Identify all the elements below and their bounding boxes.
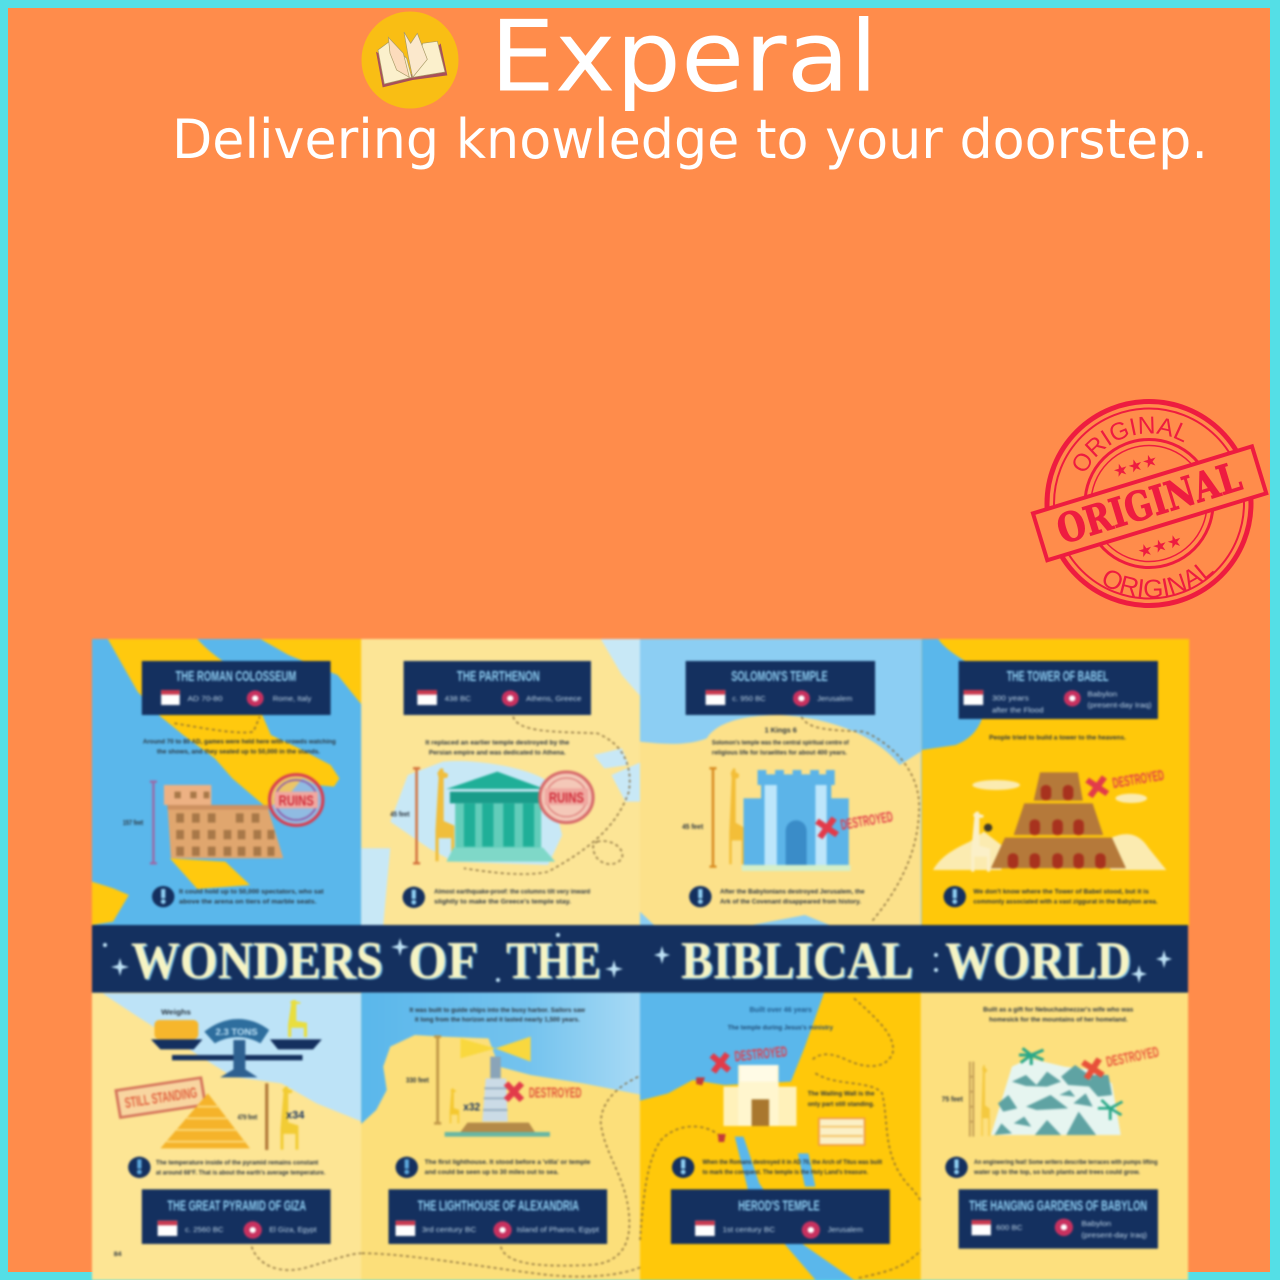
description [712, 726, 849, 756]
caption: info: at around 68°F. That is about the earth's average temperature. [156, 1169, 325, 1177]
caption: info: An engineering feat! Some writers describe terraces with pumps lifting [974, 1159, 1158, 1166]
map: sea [103, 993, 362, 1122]
description: it long from the horizon and it lasted nearly 1,500 years. [415, 1016, 580, 1023]
caption: info: to mark the conquest. The temple is the Holy Land's treasure. [702, 1169, 868, 1176]
height scale [406, 1037, 441, 1123]
panel: Herod's Temple [640, 993, 929, 1280]
panel: Hanging Gardens of Babylon [921, 993, 1188, 1280]
panel: Roman Colosseum [92, 639, 362, 926]
header box: HEROD'S TEMPLE [738, 1198, 820, 1215]
route [362, 1075, 642, 1277]
caption: info: The temperature inside of the pyramid remains constant [156, 1160, 319, 1167]
label: destroyed [506, 1083, 582, 1101]
illustration: gardens [991, 1048, 1122, 1135]
giraffe [435, 768, 454, 861]
title banner: WORLD [945, 932, 1131, 990]
height scale [682, 768, 716, 867]
title banner: OF [410, 933, 480, 991]
height scale [238, 1083, 267, 1150]
stamp: original seal: ORIGINAL [1073, 416, 1184, 471]
infographic artwork [92, 639, 1189, 1280]
map: Italy [92, 639, 362, 925]
title banner: THE [508, 933, 602, 991]
header box: THE PARTHENON [457, 668, 540, 685]
route [801, 717, 919, 922]
header box [959, 1189, 1158, 1249]
title banner: WORLD [946, 933, 1132, 991]
description: religious life for Israelites for about 400 years. [712, 749, 847, 756]
caption: info: water up to the top, so lush plants and trees could grow. [973, 1169, 1140, 1176]
header box: c. 950 BC [732, 694, 766, 703]
caption: info: Almost earthquake-proof: the columns tilt very inward [434, 888, 590, 895]
header box: SOLOMON'S TEMPLE [731, 668, 828, 685]
header box: 438 BC [445, 694, 472, 703]
map: water [922, 639, 987, 750]
route markers [696, 1077, 726, 1142]
description: 1 Kings 6 [765, 726, 797, 734]
header box: THE GREAT PYRAMID OF GIZA [167, 1198, 306, 1215]
caption: info: commonly associated with a vast ziggurat in the Babylon area. [973, 898, 1158, 905]
title banner: BIBLICAL [681, 932, 913, 990]
caption: info: When the Romans destroyed it in AD 70, the Arch of Titus was built [702, 1159, 883, 1166]
caption: info: above the arena on tiers of marble seats. [179, 898, 317, 905]
description: Around 70 to 80 AD, games were held here with crowds watching [143, 738, 336, 745]
stamp: original seal [1030, 399, 1269, 608]
header box [671, 1189, 890, 1244]
label: destroyed [1087, 767, 1166, 796]
header box: 1st century BC [722, 1225, 776, 1234]
illustration: balance scale: 2.3 TONS [216, 1027, 258, 1038]
label: destroyed: DESTROYED [734, 1044, 788, 1065]
stamp: ruins [540, 772, 593, 823]
header box: THE ROMAN COLOSSEUM [176, 668, 296, 685]
caption: info [945, 1157, 1158, 1178]
description: It was built to guide ships into the busy harbor. Sailors saw [410, 1007, 586, 1014]
caption: info: We don't know where the Tower of Babel stood, but it is [973, 888, 1149, 895]
panel: The Parthenon [361, 639, 642, 926]
stamp: original seal: ORIGINAL [1104, 564, 1214, 598]
caption: info: It could hold up to 50,000 spectators, who sat [179, 888, 324, 895]
header box: after the Flood [992, 706, 1044, 714]
header box: El Giza, Egypt [269, 1225, 317, 1234]
header box: THE TOWER OF BABEL [1007, 668, 1108, 685]
height scale: 45 feet [390, 811, 410, 819]
header box: (present-day Iraq) [1081, 1230, 1148, 1239]
description: People tried to build a tower to the heavens. [989, 734, 1126, 741]
caption: info: Ark of the Covenant disappeared from history. [720, 898, 861, 905]
header box: Island of Pharos, Egypt [517, 1225, 600, 1234]
caption: info [403, 887, 590, 908]
header box: Jerusalem [817, 694, 852, 703]
caption: info [672, 1157, 883, 1178]
height scale: 479 feet [238, 1113, 258, 1121]
header box: Babylon [1081, 1219, 1111, 1228]
caption: info: The first lighthouse. It stood before a 'villa' or temple [425, 1159, 590, 1166]
label: destroyed: DESTROYED [1111, 767, 1165, 792]
description: The temple during Jesus's ministry [728, 1024, 833, 1031]
header box: 300 years [992, 694, 1029, 703]
height scale [942, 1062, 973, 1137]
illustration: balance scale: Weighs [161, 1009, 191, 1017]
stamp: ruins [270, 775, 323, 825]
label: destroyed [711, 1044, 789, 1072]
map: land [640, 715, 921, 925]
title banner: OF [408, 932, 478, 990]
header box [686, 661, 875, 715]
illustration: colosseum [164, 785, 283, 858]
header box: 3rd century BC [422, 1225, 477, 1234]
header box: c. 2560 BC [185, 1225, 224, 1234]
title banner: WONDERS [132, 933, 384, 991]
note: wailing wall: The Wailing Wall is the [808, 1090, 875, 1097]
description [143, 738, 336, 755]
description [728, 1006, 833, 1031]
description: homesick for the mountains of her homeland. [989, 1016, 1128, 1023]
title banner: WONDERS [131, 932, 383, 990]
stamp: still standing: STILL STANDING [124, 1085, 198, 1112]
brand name: Experal [490, 0, 878, 114]
title banner: THE [506, 932, 601, 990]
caption: info: and could be seen up to 30 miles out to sea. [425, 1169, 559, 1176]
giraffe [981, 1065, 990, 1136]
giraffe [281, 1087, 298, 1150]
panel: Great Pyramid of Giza [92, 993, 362, 1280]
panel: Solomon's Temple [640, 639, 922, 926]
dunes and clouds [933, 780, 1166, 870]
description: Built over 46 years [749, 1006, 812, 1014]
caption: info [128, 1157, 325, 1178]
panel: The Tower of Babel [922, 639, 1189, 926]
header box [959, 661, 1158, 719]
giraffe [450, 1088, 459, 1123]
label: destroyed: DESTROYED [1105, 1044, 1161, 1071]
giraffe [729, 768, 744, 864]
height scale [390, 768, 420, 863]
caption: info: slightly to make the Greece's temple stay. [434, 898, 571, 905]
header box: Rome, Italy [273, 694, 312, 703]
note: wailing wall: only part still standing. [808, 1101, 874, 1108]
caption: info: After the Babylonians destroyed Jerusalem, the [720, 888, 865, 895]
header box: Athens, Greece [526, 694, 582, 703]
stamp: still standing [116, 1078, 205, 1118]
description: Solomon's temple was the central spiritual centre of [712, 739, 849, 746]
route [252, 1247, 362, 1270]
stamp: ruins: RUINS [549, 790, 584, 806]
label: destroyed: DESTROYED [529, 1085, 582, 1101]
header box: Jerusalem [828, 1225, 863, 1234]
header box [389, 1189, 607, 1244]
multiplier: x34 [286, 1109, 305, 1121]
title banner: BIBLICAL [682, 933, 914, 991]
map: sea [361, 639, 642, 925]
title banner [92, 925, 1188, 993]
header box: AD 70-80 [187, 694, 223, 703]
note: wailing wall [808, 1090, 875, 1145]
description [410, 1007, 586, 1023]
description: It replaced an earlier temple destroyed by the [425, 739, 569, 746]
illustration: parthenon [446, 772, 555, 862]
route [640, 998, 929, 1278]
label: destroyed: DESTROYED [839, 809, 894, 834]
logo: open book on yellow circle [362, 12, 458, 108]
header box [142, 661, 331, 715]
description [983, 1006, 1134, 1023]
illustration: gate [742, 770, 851, 871]
panel: Lighthouse of Alexandria [361, 993, 642, 1280]
map: Nile [735, 1137, 854, 1280]
caption: info [152, 886, 324, 907]
illustration: temple [724, 1065, 797, 1126]
giraffe [971, 812, 990, 872]
height scale: 45 feet [682, 823, 704, 831]
header box: Babylon [1087, 690, 1117, 698]
map: sea [640, 993, 824, 1101]
stamp: original seal: ★★★ [1135, 530, 1185, 563]
route [174, 717, 260, 733]
header box: THE LIGHTHOUSE OF ALEXANDRIA [418, 1198, 579, 1215]
bird [984, 824, 992, 832]
map: sea [361, 993, 642, 1124]
illustration: balance scale [151, 1000, 322, 1077]
height scale [123, 782, 157, 863]
illustration: tower [991, 772, 1126, 869]
height scale: 330 feet [406, 1077, 429, 1085]
stamp: original seal: ★★★ [1111, 450, 1160, 483]
caption: info [396, 1157, 590, 1178]
route [464, 717, 630, 874]
description: Persian empire and was dedicated to Athena. [429, 749, 566, 756]
description [425, 739, 569, 756]
header box [404, 661, 591, 715]
illustration: lighthouse [445, 1037, 550, 1137]
label: destroyed [1082, 1044, 1161, 1079]
height scale: 75 feet [942, 1095, 963, 1103]
illustration: pyramid [160, 1093, 250, 1148]
page number: 84 [114, 1251, 122, 1258]
multiplier: x32 [463, 1102, 480, 1114]
stamp: ruins: RUINS [279, 793, 314, 810]
height scale: 157 feet [123, 819, 144, 827]
caption: info [689, 886, 865, 907]
tagline: Delivering knowledge to your doorstep. [172, 108, 1208, 171]
caption: info [944, 886, 1158, 907]
header box: 600 BC [996, 1223, 1023, 1232]
label: destroyed [817, 809, 894, 838]
header box [142, 1189, 331, 1244]
header box: THE HANGING GARDENS OF BABYLON [969, 1198, 1147, 1215]
description: the shows, and they seated up to 50,000 in the stands. [157, 748, 320, 755]
description: Built as a gift for Nebuchadnezzar's wife who was [983, 1006, 1134, 1013]
header box: (present-day Iraq) [1087, 701, 1152, 710]
